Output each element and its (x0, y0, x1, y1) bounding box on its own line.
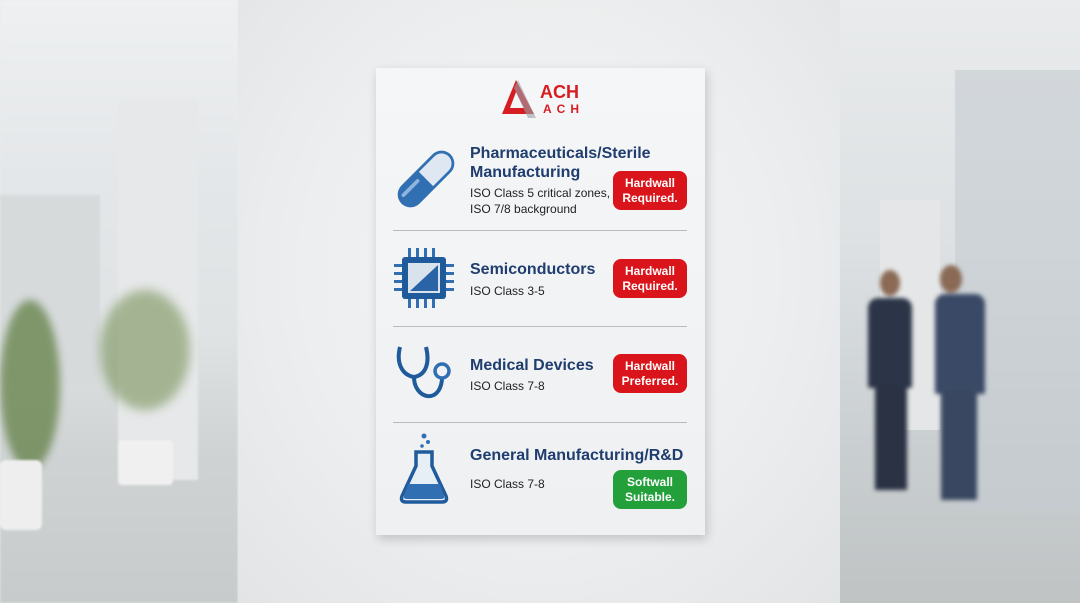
row: medical devices (396, 346, 687, 398)
row: general manufacturing: ISO Class 7-8 (470, 477, 545, 491)
sign board (376, 68, 705, 535)
icon: flask (400, 434, 448, 504)
row: pharmaceuticals: ISO 7/8 background (470, 202, 577, 216)
row: medical devices: Preferred. (622, 374, 678, 388)
row: general manufacturing: Suitable. (625, 490, 675, 504)
background: wall (238, 0, 840, 603)
people (864, 262, 988, 504)
row: pharmaceuticals (398, 145, 687, 216)
logo: ACH (543, 102, 584, 116)
row: semiconductors: Semiconductors (470, 261, 595, 278)
row: medical devices: Hardwall (625, 359, 675, 373)
row: medical devices: Medical Devices (470, 357, 594, 374)
background: right office with people (840, 0, 1080, 603)
icon: chip (394, 248, 454, 308)
badge (613, 171, 687, 210)
background: left office (0, 0, 238, 603)
row: pharmaceuticals: Manufacturing (470, 164, 580, 181)
logo (502, 80, 584, 118)
row: general manufacturing: Softwall (627, 475, 673, 489)
row: semiconductors: Hardwall (625, 264, 675, 278)
row: medical devices: ISO Class 7-8 (470, 379, 545, 393)
row: semiconductors: Required. (622, 279, 678, 293)
badge: Hardwall (625, 176, 675, 190)
logo: ACH (540, 82, 579, 102)
row: pharmaceuticals: Pharmaceuticals/Sterile (470, 145, 651, 162)
row: semiconductors: ISO Class 3-5 (470, 284, 545, 298)
row: semiconductors (394, 248, 687, 308)
icon: stethoscope (396, 346, 451, 398)
row: general manufacturing (400, 434, 687, 509)
badge: Required. (622, 191, 678, 205)
row: general manufacturing: General Manufacturing/R&D (470, 447, 683, 464)
row: pharmaceuticals: ISO Class 5 critical zones, (470, 186, 610, 200)
icon: capsule (398, 150, 454, 208)
